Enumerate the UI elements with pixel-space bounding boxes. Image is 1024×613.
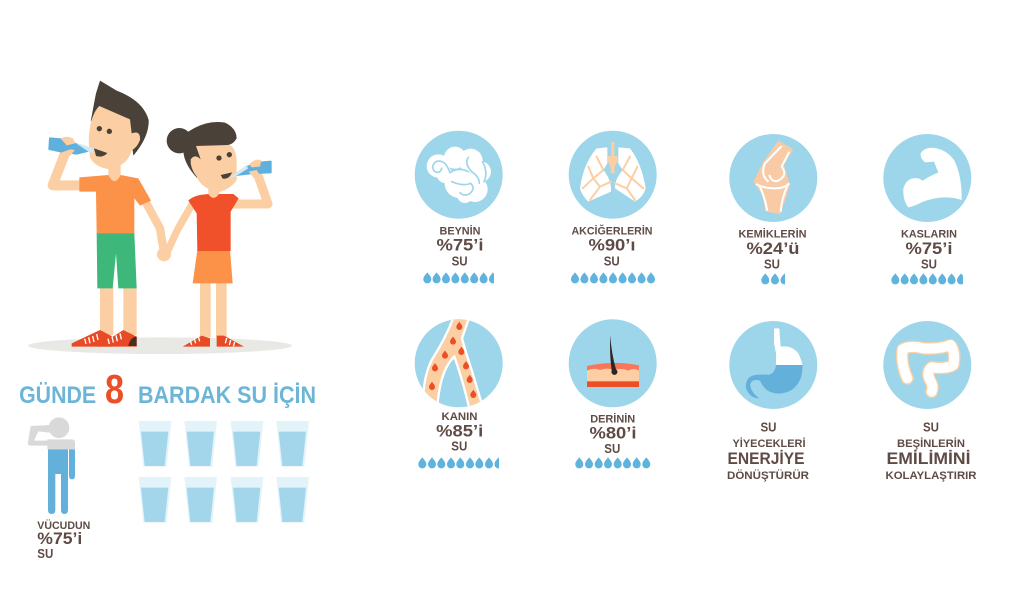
icon: brain [427, 147, 491, 203]
panel: lungs: SU [604, 254, 620, 269]
heading: GÜNDE [19, 382, 96, 409]
panel: intestine: BEŞİNLERİN [897, 437, 965, 450]
panel: blood [415, 315, 503, 468]
panel: bones: SU [764, 256, 780, 271]
water drops [571, 272, 655, 283]
panel: brain [415, 131, 503, 283]
panel: blood: KANIN [442, 411, 478, 423]
panel: muscles: SU [921, 256, 937, 271]
panel: intestine: SU [923, 420, 939, 435]
panel: lungs: AKCİĞERLERİN [572, 224, 653, 237]
panel: blood: SU [451, 439, 467, 454]
panel: bones: %24’ü [746, 239, 800, 258]
icon: blood vessels [423, 315, 483, 408]
panel: bones [729, 134, 817, 284]
body water label: VÜCUDUN [37, 519, 90, 532]
drinking figure icon: body 75 percent water [28, 417, 75, 514]
heading [19, 366, 316, 412]
body water label: SU [37, 546, 53, 561]
big number 8: 8 [105, 366, 124, 412]
panel: stomach: YİYECEKLERİ [732, 437, 806, 450]
panel: brain: %75’i [436, 236, 484, 255]
panel: bones: KEMİKLERİN [738, 227, 807, 240]
panel: stomach [727, 321, 817, 482]
icon: knee joint [753, 141, 793, 214]
illustration: couple drinking water [28, 81, 292, 354]
panel: brain: BEYNİN [440, 224, 481, 237]
man [49, 81, 171, 347]
icon: stomach [746, 328, 802, 398]
panel: intestine [883, 321, 977, 482]
icon: skin section with hair [587, 335, 639, 387]
ground shadow [28, 337, 292, 354]
panel: skin: DERİNİN [590, 413, 635, 426]
water drops [761, 274, 785, 284]
water glasses grid [139, 421, 309, 523]
panel: brain: SU [452, 254, 468, 269]
woman [167, 122, 271, 347]
panel: lungs: %90’ı [588, 236, 636, 255]
icon: large intestine [902, 345, 954, 392]
panel: skin: %80’i [590, 424, 636, 443]
heading: BARDAK SU İÇİN [138, 382, 316, 409]
icon: flexed arm [903, 148, 962, 207]
body water label: %75’i [37, 529, 82, 548]
water drops [418, 457, 502, 468]
panel: muscles [883, 134, 971, 284]
water drops [423, 272, 497, 283]
panel: stomach: SU [760, 420, 776, 435]
panel: intestine: EMİLİMİNİ [886, 449, 970, 468]
panel: intestine: KOLAYLAŞTIRIR [886, 470, 977, 482]
panel: stomach: DÖNÜŞTÜRÜR [727, 469, 809, 482]
panel: blood: %85’i [436, 421, 483, 440]
body water label [37, 519, 90, 561]
panel: skin [569, 319, 657, 468]
panel: skin: SU [604, 441, 620, 456]
icon: lungs [580, 142, 646, 202]
panel: muscles: %75’i [906, 239, 952, 258]
panel: lungs [569, 131, 657, 283]
panel: muscles: KASLARIN [901, 228, 957, 240]
water drops [575, 457, 650, 468]
water drops [891, 273, 965, 284]
panel: stomach: ENERJİYE [728, 449, 804, 468]
infographic canvas [20, 80, 976, 558]
